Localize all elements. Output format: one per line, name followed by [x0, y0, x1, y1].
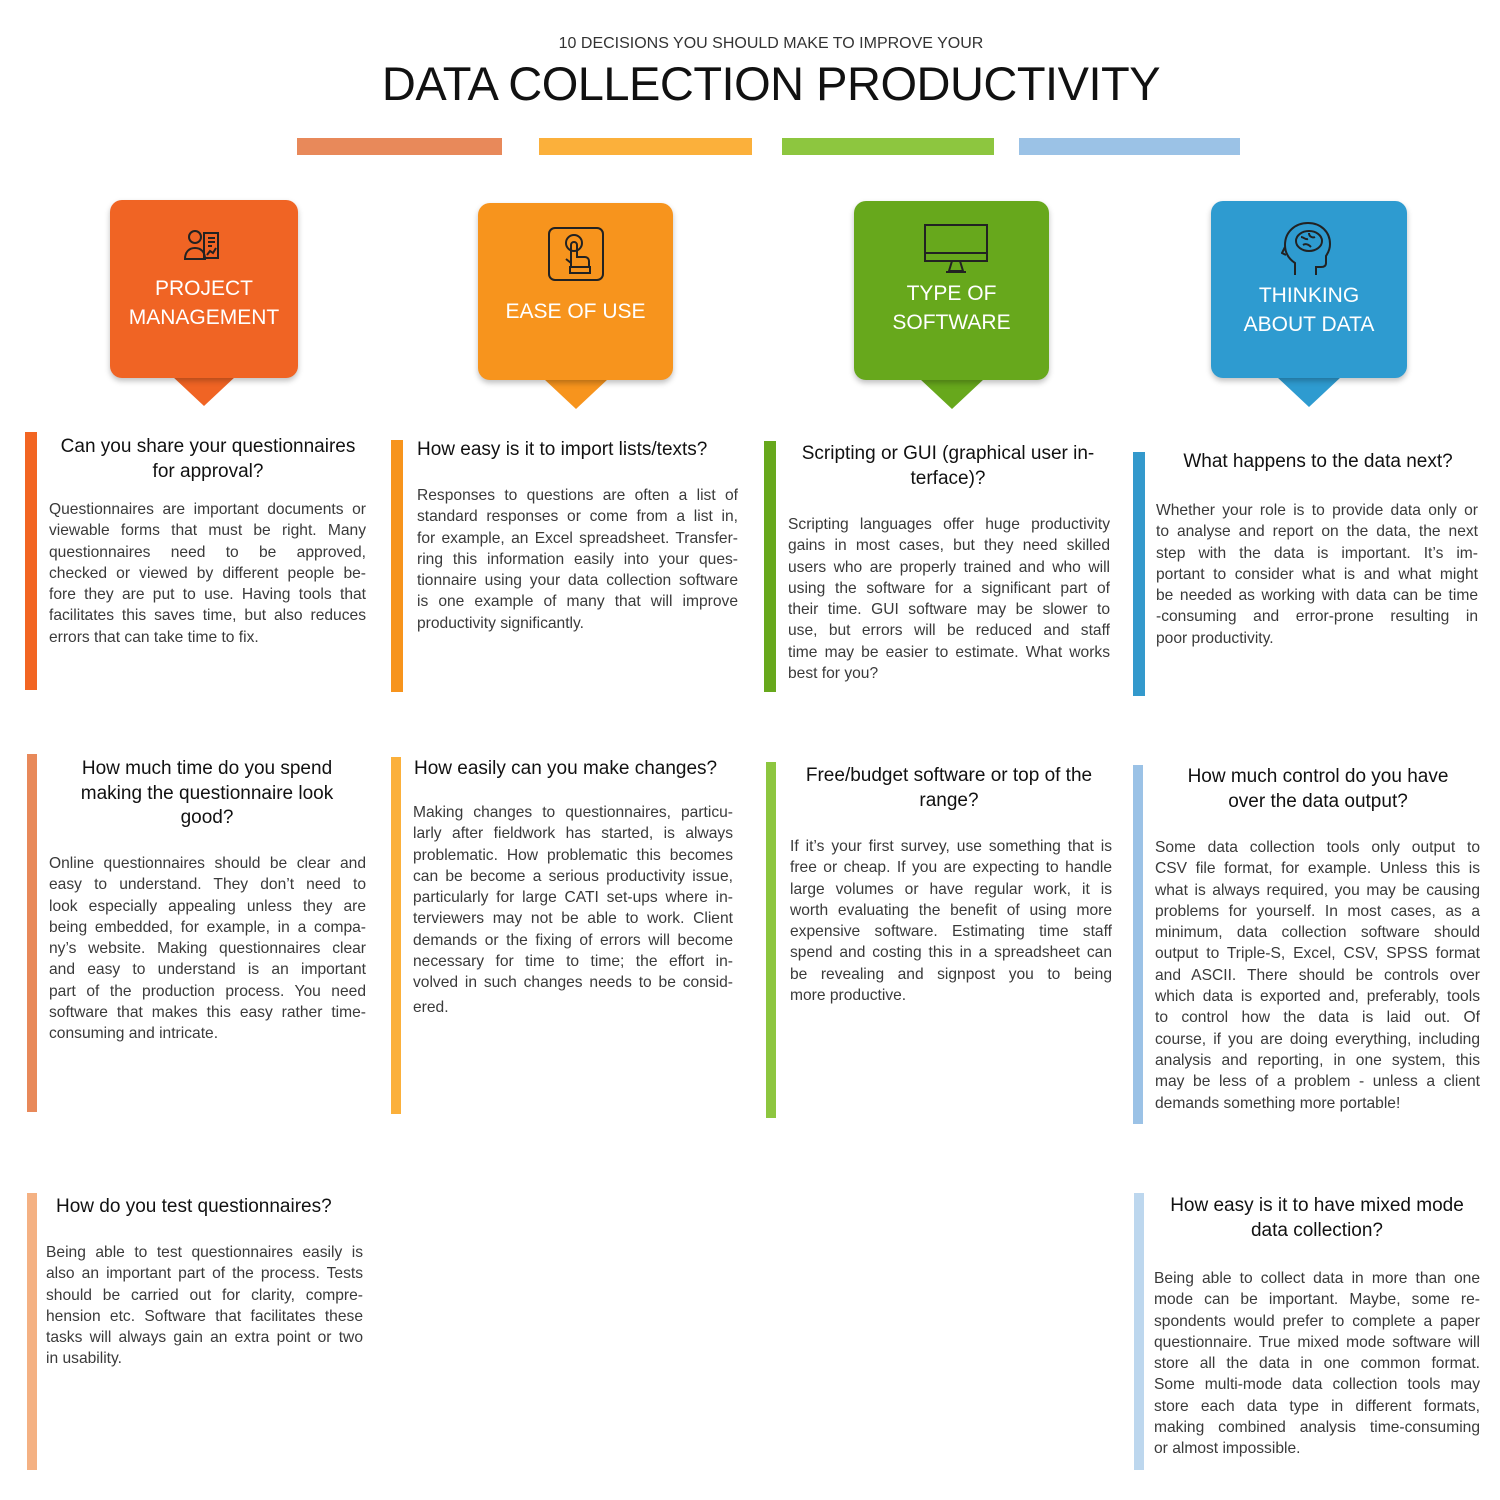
- card: ease of use: [475, 203, 676, 409]
- section: scripting or GUI: terface)?: [910, 468, 985, 488]
- section: control over data output: may be less of a problem - unless a client: [1155, 1073, 1480, 1090]
- section: share questionnaires: Can you share your questionnaires: [61, 436, 355, 457]
- section: what happens next: to analyse and report on the data, the next: [1156, 523, 1478, 540]
- section: free or top of range: expensive software. Estimating time staff: [790, 923, 1112, 940]
- section: make changes: How easily can you make changes?: [414, 758, 717, 779]
- section: control over data output: Some data collection tools only output to: [1155, 839, 1480, 856]
- section: free or top of range: Free/budget software or top of the: [806, 765, 1092, 786]
- section: import lists: tionnaire using your data collection software: [417, 572, 738, 589]
- section: look good: and easy to understand is an important: [49, 961, 366, 978]
- section: control over data output: and ASCII. There should be controls over: [1155, 967, 1480, 984]
- icon: monitor: [924, 224, 988, 273]
- section: look good: making the questionnaire look: [81, 782, 333, 804]
- card: type of software: SOFTWARE: [892, 311, 1011, 334]
- section: what happens next: What happens to the data next?: [1183, 451, 1453, 472]
- section: free or top of range: more productive.: [790, 987, 906, 1004]
- section: what happens next: portant to consider what is and what might: [1156, 566, 1478, 583]
- section: mixed mode: How easy is it to have mixed mode: [1170, 1195, 1464, 1216]
- section: free or top of range: worth evaluating the benefit of using more: [790, 902, 1112, 919]
- section: control over data output: what is always required, you may be causing: [1155, 882, 1480, 899]
- section: share questionnaires: errors that can take time to fix.: [49, 629, 259, 646]
- section: scripting or GUI: best for you?: [788, 665, 878, 682]
- section: share questionnaires: for approval?: [153, 460, 263, 482]
- card: project management: [107, 200, 301, 406]
- icon: brain head: [1281, 222, 1331, 275]
- section: look good: part of the production process. You need: [49, 983, 366, 1000]
- section: import lists: standard responses or come from a list in,: [417, 508, 738, 525]
- section: what happens next: Whether your role is to provide data only or: [1156, 502, 1478, 519]
- card: type of software: TYPE OF: [907, 282, 996, 305]
- section: import lists: productivity significantly.: [417, 615, 584, 632]
- section: make changes: Making changes to questionnaires, particu-: [413, 804, 733, 821]
- section: make changes: can be become a serious productivity issue,: [413, 868, 733, 885]
- section: mixed mode: making combined analysis time-consuming: [1154, 1419, 1480, 1436]
- section: control over data output: problems for yourself. In most cases, as a: [1155, 903, 1480, 920]
- section: scripting or GUI: their time. GUI software may be slower to: [788, 601, 1110, 618]
- section: control over data output: [1133, 765, 1480, 1124]
- section: import lists: How easy is it to import lists/texts?: [417, 439, 707, 460]
- section: mixed mode: mode can be important. Maybe, some re-: [1154, 1291, 1480, 1308]
- section: import lists: Responses to questions are often a list of: [417, 487, 738, 504]
- section: test questionnaires: tasks will always gain an extra point or two: [46, 1329, 363, 1346]
- section: test questionnaires: hension etc. Software that facilitates these: [46, 1308, 363, 1325]
- section: free or top of range: range?: [919, 790, 979, 810]
- section: look good: ny’s website. Making questionnaires clear: [49, 940, 366, 957]
- section: import lists: ring this information easily into your ques-: [417, 551, 738, 568]
- section: look good: Online questionnaires should be clear and: [49, 855, 366, 872]
- section: look good: How much time do you spend: [82, 758, 332, 779]
- section: control over data output: CSV file format, for example. Unless this is: [1155, 860, 1480, 877]
- section: scripting or GUI: Scripting languages offer huge productivity: [788, 516, 1110, 533]
- section: scripting or GUI: users who are properly trained and who will: [788, 559, 1110, 576]
- section: share questionnaires: checked or viewed by different people be-: [49, 565, 366, 582]
- section: import lists: [391, 439, 738, 692]
- section: free or top of range: large volumes or have regular work, it is: [790, 881, 1112, 898]
- section: make changes: necessary for time to time; the effort in-: [413, 953, 733, 970]
- section: scripting or GUI: [764, 441, 1110, 692]
- section: free or top of range: free or cheap. If you are expecting to handle: [790, 859, 1112, 876]
- section: share questionnaires: questionnaires need to be approved,: [49, 544, 366, 561]
- section: test questionnaires: [27, 1193, 363, 1470]
- section: scripting or GUI: time may be easier to estimate. What works: [788, 644, 1110, 661]
- section: test questionnaires: should be carried out for clarity, compre-: [46, 1287, 363, 1304]
- section: control over data output: How much control do you have: [1188, 766, 1448, 787]
- section: test questionnaires: also an important part of the process. Tests: [46, 1265, 363, 1282]
- section: share questionnaires: Questionnaires are important documents or: [49, 501, 366, 518]
- section: mixed mode: spondents would prefer to complete a paper: [1154, 1313, 1480, 1330]
- section: control over data output: demands something more portable!: [1155, 1095, 1400, 1112]
- section: import lists: is one example of many that will improve: [417, 593, 738, 610]
- section: look good: look especially appealing unless they are: [49, 898, 366, 915]
- card: project management: MANAGEMENT: [129, 306, 279, 329]
- section: control over data output: output to Triple-S, Excel, CSV, SPSS format: [1155, 945, 1480, 962]
- section: mixed mode: questionnaire. True mixed mode software will: [1154, 1334, 1480, 1351]
- section: free or top of range: be revealing and signpost you to being: [790, 966, 1112, 983]
- title: DATA COLLECTION PRODUCTIVITY: [382, 57, 1160, 110]
- section: make changes: [391, 757, 733, 1114]
- section: control over data output: which data is exported and, preferably, tools: [1155, 988, 1480, 1005]
- section: import lists: for example, an Excel spreadsheet. Transfer-: [417, 530, 738, 547]
- section: mixed mode: Being able to collect data in more than one: [1154, 1270, 1480, 1287]
- section: look good: software that makes this easy rather time-: [49, 1004, 366, 1021]
- section: make changes: particularly for large CATI set-ups where in-: [413, 889, 733, 906]
- section: make changes: ered.: [413, 999, 449, 1016]
- subtitle: 10 DECISIONS YOU SHOULD MAKE TO IMPROVE YOUR: [559, 35, 983, 52]
- section: free or top of range: If it’s your first survey, use something that is: [790, 838, 1112, 855]
- section: control over data output: over the data output?: [1228, 790, 1408, 812]
- section: make changes: demands or the fixing of errors will become: [413, 932, 733, 949]
- section: share questionnaires: facilitates this saves time, but also reduces: [49, 607, 366, 624]
- section: mixed mode: Some multi-mode data collection tools may: [1154, 1376, 1480, 1393]
- card: ease of use: EASE OF USE: [505, 300, 646, 323]
- card: type of software: [851, 201, 1052, 409]
- section: mixed mode: data collection?: [1251, 1220, 1383, 1240]
- card: thinking about data: THINKING: [1259, 284, 1359, 307]
- section: what happens next: be needed as working with data can be time: [1156, 587, 1478, 604]
- section: what happens next: [1133, 451, 1478, 696]
- card: thinking about data: [1208, 201, 1410, 407]
- section: make changes: larly after fieldwork has started, is always: [413, 825, 733, 842]
- section: what happens next: -consuming and error-prone resulting in: [1156, 608, 1478, 625]
- section: control over data output: course, if you are doing everything, including: [1155, 1031, 1480, 1048]
- icon: touch hand: [548, 227, 604, 281]
- card: thinking about data: ABOUT DATA: [1244, 313, 1374, 336]
- section: mixed mode: [1134, 1193, 1480, 1470]
- section: make changes: volved in such changes needs to be consid-: [413, 974, 733, 991]
- card: project management: PROJECT: [155, 277, 253, 300]
- section: mixed mode: store all the data in one common format.: [1154, 1355, 1480, 1372]
- section: control over data output: minimum, data collection software should: [1155, 924, 1480, 941]
- colour strip: [297, 138, 1240, 155]
- section: make changes: problematic. How problematic this becomes: [413, 847, 733, 864]
- section: look good: being embedded, for example, in a compa-: [49, 919, 366, 936]
- section: share questionnaires: [25, 432, 366, 690]
- section: what happens next: poor productivity.: [1156, 630, 1274, 647]
- section: what happens next: step with the data is important. It’s im-: [1156, 545, 1478, 562]
- section: scripting or GUI: using the software for a significant part of: [788, 580, 1110, 597]
- section: test questionnaires: Being able to test questionnaires easily is: [46, 1244, 363, 1261]
- icon: manager with report: [184, 230, 219, 260]
- section: look good: consuming and intricate.: [49, 1025, 218, 1042]
- section: test questionnaires: How do you test questionnaires?: [56, 1196, 332, 1217]
- section: mixed mode: store each data type in different formats,: [1154, 1398, 1480, 1415]
- section: scripting or GUI: Scripting or GUI (graphical user in-: [802, 443, 1094, 464]
- section: control over data output: to control how the data is laid out. Of: [1155, 1009, 1480, 1026]
- section: control over data output: analysis and reporting, in one system, this: [1155, 1052, 1480, 1069]
- section: mixed mode: or almost impossible.: [1154, 1440, 1300, 1457]
- section: scripting or GUI: gains in most cases, but they need skilled: [788, 537, 1110, 554]
- section: look good: easy to understand. They don’t need to: [49, 876, 366, 893]
- section: scripting or GUI: use, but errors will be reduced and staff: [788, 622, 1110, 639]
- section: look good: good?: [181, 807, 233, 828]
- section: look good: [27, 754, 366, 1112]
- section: test questionnaires: in usability.: [46, 1350, 122, 1367]
- section: free or top of range: [766, 762, 1112, 1118]
- section: make changes: terviewers may not be able to work. Client: [413, 910, 733, 927]
- section: free or top of range: spend and costing this in a spreadsheet can: [790, 944, 1112, 961]
- section: share questionnaires: fore they are put to use. Having tools that: [49, 586, 366, 603]
- section: share questionnaires: viewable forms that must be right. Many: [49, 522, 366, 539]
